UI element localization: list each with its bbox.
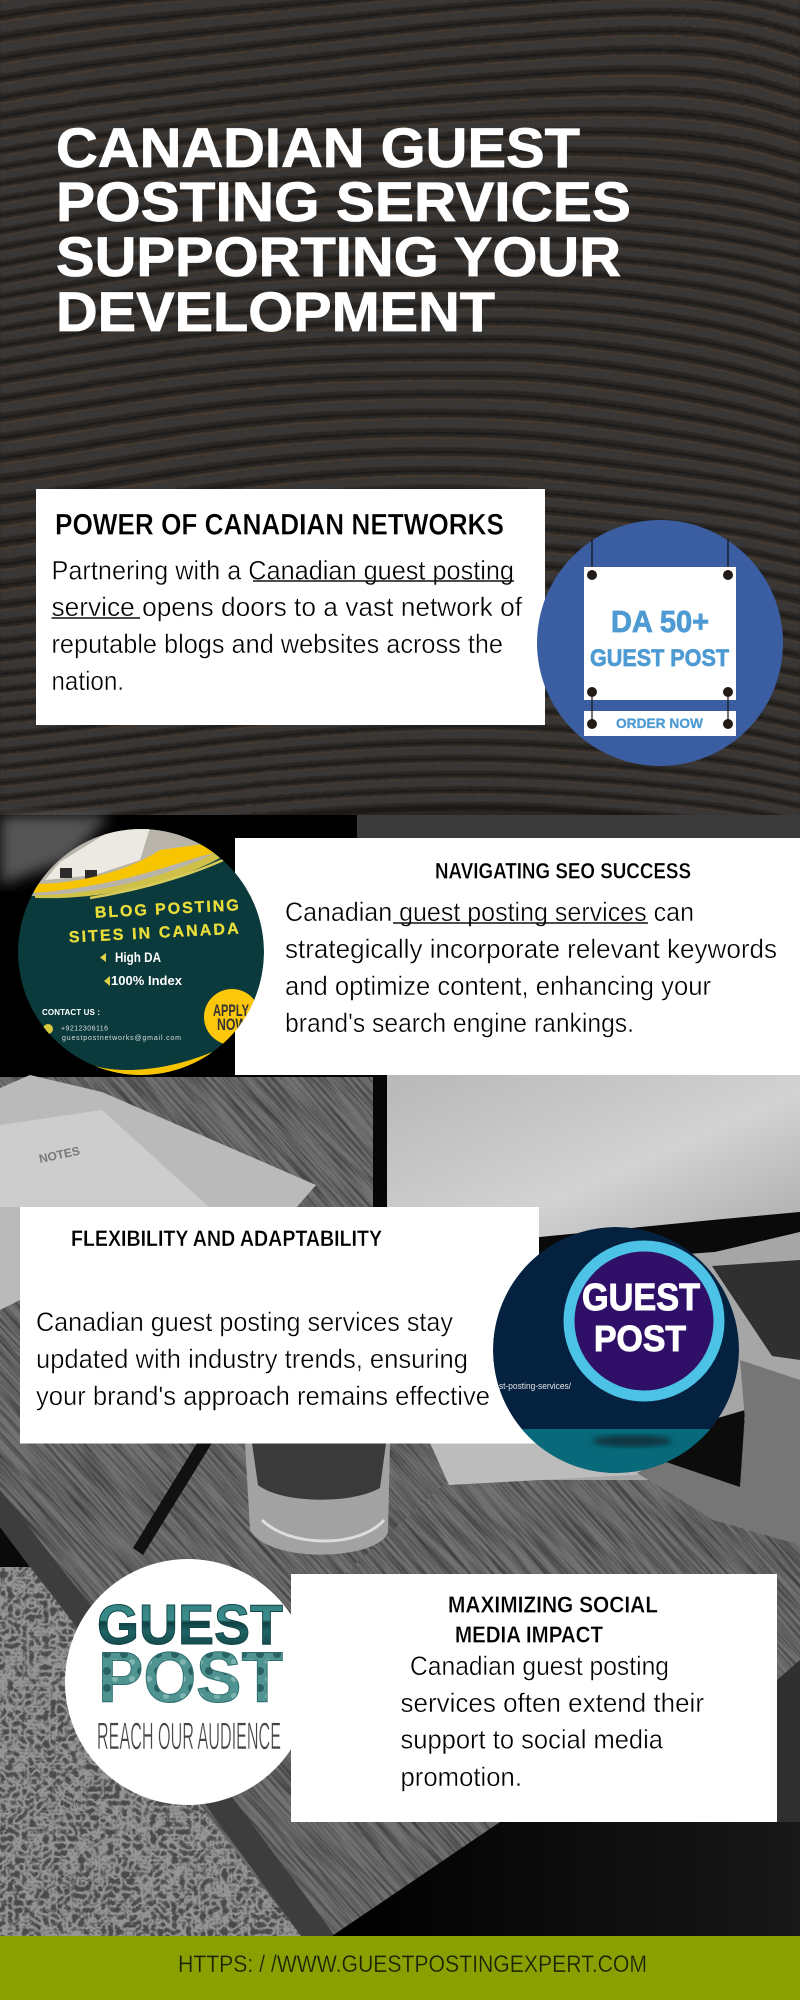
apply now badge: NOW	[217, 1015, 248, 1034]
panel: maximizing social media impact: services often extend their	[400, 1688, 704, 1718]
icon: guest post purple badge circle: st-posting-services/	[499, 1381, 571, 1391]
notes papers: NOTES	[38, 1144, 81, 1166]
title: SUPPORTING YOUR	[56, 225, 621, 288]
hand	[637, 1360, 800, 1545]
infographic canvas: REACH OUR AUDIENCE	[97, 1716, 281, 1758]
background: dark wavy texture	[0, 0, 800, 862]
purple ring badge: GUEST	[582, 1277, 700, 1319]
panel: maximizing social media impact: MAXIMIZING SOCIAL	[448, 1592, 658, 1618]
laptop screen	[373, 1075, 800, 1280]
icon: blog posting sites in Canada circle: High DA	[115, 949, 161, 965]
panel: power of Canadian networks: POWER OF CANADIAN NETWORKS	[55, 508, 504, 542]
panel: maximizing social media impact: MEDIA IMPACT	[455, 1622, 603, 1648]
icon: guest post reach our audience circle	[65, 1559, 311, 1805]
hanging sign card: GUEST POST	[590, 645, 729, 672]
apply now badge	[204, 989, 254, 1044]
apply now badge: APPLY	[213, 1001, 249, 1020]
icon: guest post purple badge circle	[490, 1227, 740, 1473]
hanging sign card: ORDER NOW	[616, 715, 704, 731]
laptop keyboard and base	[430, 1232, 800, 1485]
panel: maximizing social media impact: support to social media	[400, 1724, 664, 1754]
icon: blog posting sites in Canada circle: 100% Index	[111, 973, 183, 988]
panel: flexibility and adaptability: your brand's approach remains effective	[36, 1381, 490, 1411]
title: CANADIAN GUEST	[56, 116, 580, 179]
glass of water	[245, 1443, 390, 1555]
panel: navigating SEO success: NAVIGATING SEO SUCCESS	[435, 858, 691, 884]
panel: navigating SEO success: and optimize content, enhancing your	[285, 971, 711, 1001]
patterned rug	[0, 1560, 310, 1936]
panel: maximizing social media impact: Canadian guest posting	[410, 1651, 669, 1681]
panel: maximizing social media impact	[291, 1574, 777, 1822]
photo and yellow waves	[32, 829, 224, 1075]
panel: power of Canadian networks: reputable blogs and websites across the	[52, 629, 503, 659]
black area lower right	[332, 1822, 800, 1936]
panel: navigating SEO success: Canadian guest posting services can	[285, 897, 694, 927]
panel: power of Canadian networks: nation.	[52, 666, 124, 696]
panel: power of Canadian networks: Partnering with a Canadian guest posting	[52, 556, 514, 586]
title	[56, 116, 631, 343]
panel: navigating SEO success: strategically incorporate relevant keywords	[285, 934, 777, 964]
footer band with URL: HTTPS: / /WWW.GUESTPOSTINGEXPERT.COM	[178, 1951, 647, 1978]
panel: maximizing social media impact: promotion.	[400, 1762, 522, 1792]
panel: flexibility and adaptability: updated with industry trends, ensuring	[36, 1344, 468, 1374]
icon: guest post reach our audience circle: GUEST	[97, 1593, 283, 1657]
panel: flexibility and adaptability: Canadian guest posting services stay	[36, 1307, 453, 1337]
plank front face	[0, 1490, 335, 1936]
panel: navigating SEO success	[235, 838, 800, 1075]
footer band with URL	[0, 1936, 800, 2000]
badge text: BLOG POSTING	[94, 897, 239, 922]
black wedge	[0, 1527, 30, 1567]
icon: blog posting sites in Canada circle: guestpostnetworks@gmail.com	[62, 1035, 181, 1042]
badge text: SITES IN CANADA	[68, 921, 240, 946]
panel: power of Canadian networks	[36, 489, 545, 725]
icon: blog posting sites in Canada circle: +9212306116	[61, 1026, 108, 1032]
hanging sign card	[584, 539, 736, 736]
icon: DA 50+ guest post circle	[537, 520, 783, 766]
icon: guest post reach our audience circle: POST	[98, 1639, 283, 1718]
purple ring badge: POST	[594, 1318, 686, 1359]
panel: flexibility and adaptability	[20, 1207, 539, 1444]
hanging sign card: DA 50+	[611, 604, 709, 639]
background: desk photo	[0, 815, 800, 1940]
panel: power of Canadian networks: service opens doors to a vast network of	[52, 592, 522, 622]
notes papers	[0, 1075, 316, 1310]
black corner and fabric at top	[0, 815, 800, 1077]
icon: blog posting sites in Canada circle: CONTACT US :	[42, 1008, 100, 1017]
purple ring badge	[569, 1246, 719, 1396]
black phone	[133, 1443, 212, 1555]
title: POSTING SERVICES	[56, 170, 631, 233]
badge text	[69, 899, 239, 942]
panel: flexibility and adaptability: FLEXIBILITY AND ADAPTABILITY	[71, 1226, 382, 1251]
panel: navigating SEO success: brand's search engine rankings.	[285, 1008, 634, 1038]
title: DEVELOPMENT	[56, 280, 495, 343]
icon: blog posting sites in Canada circle	[18, 828, 264, 1082]
